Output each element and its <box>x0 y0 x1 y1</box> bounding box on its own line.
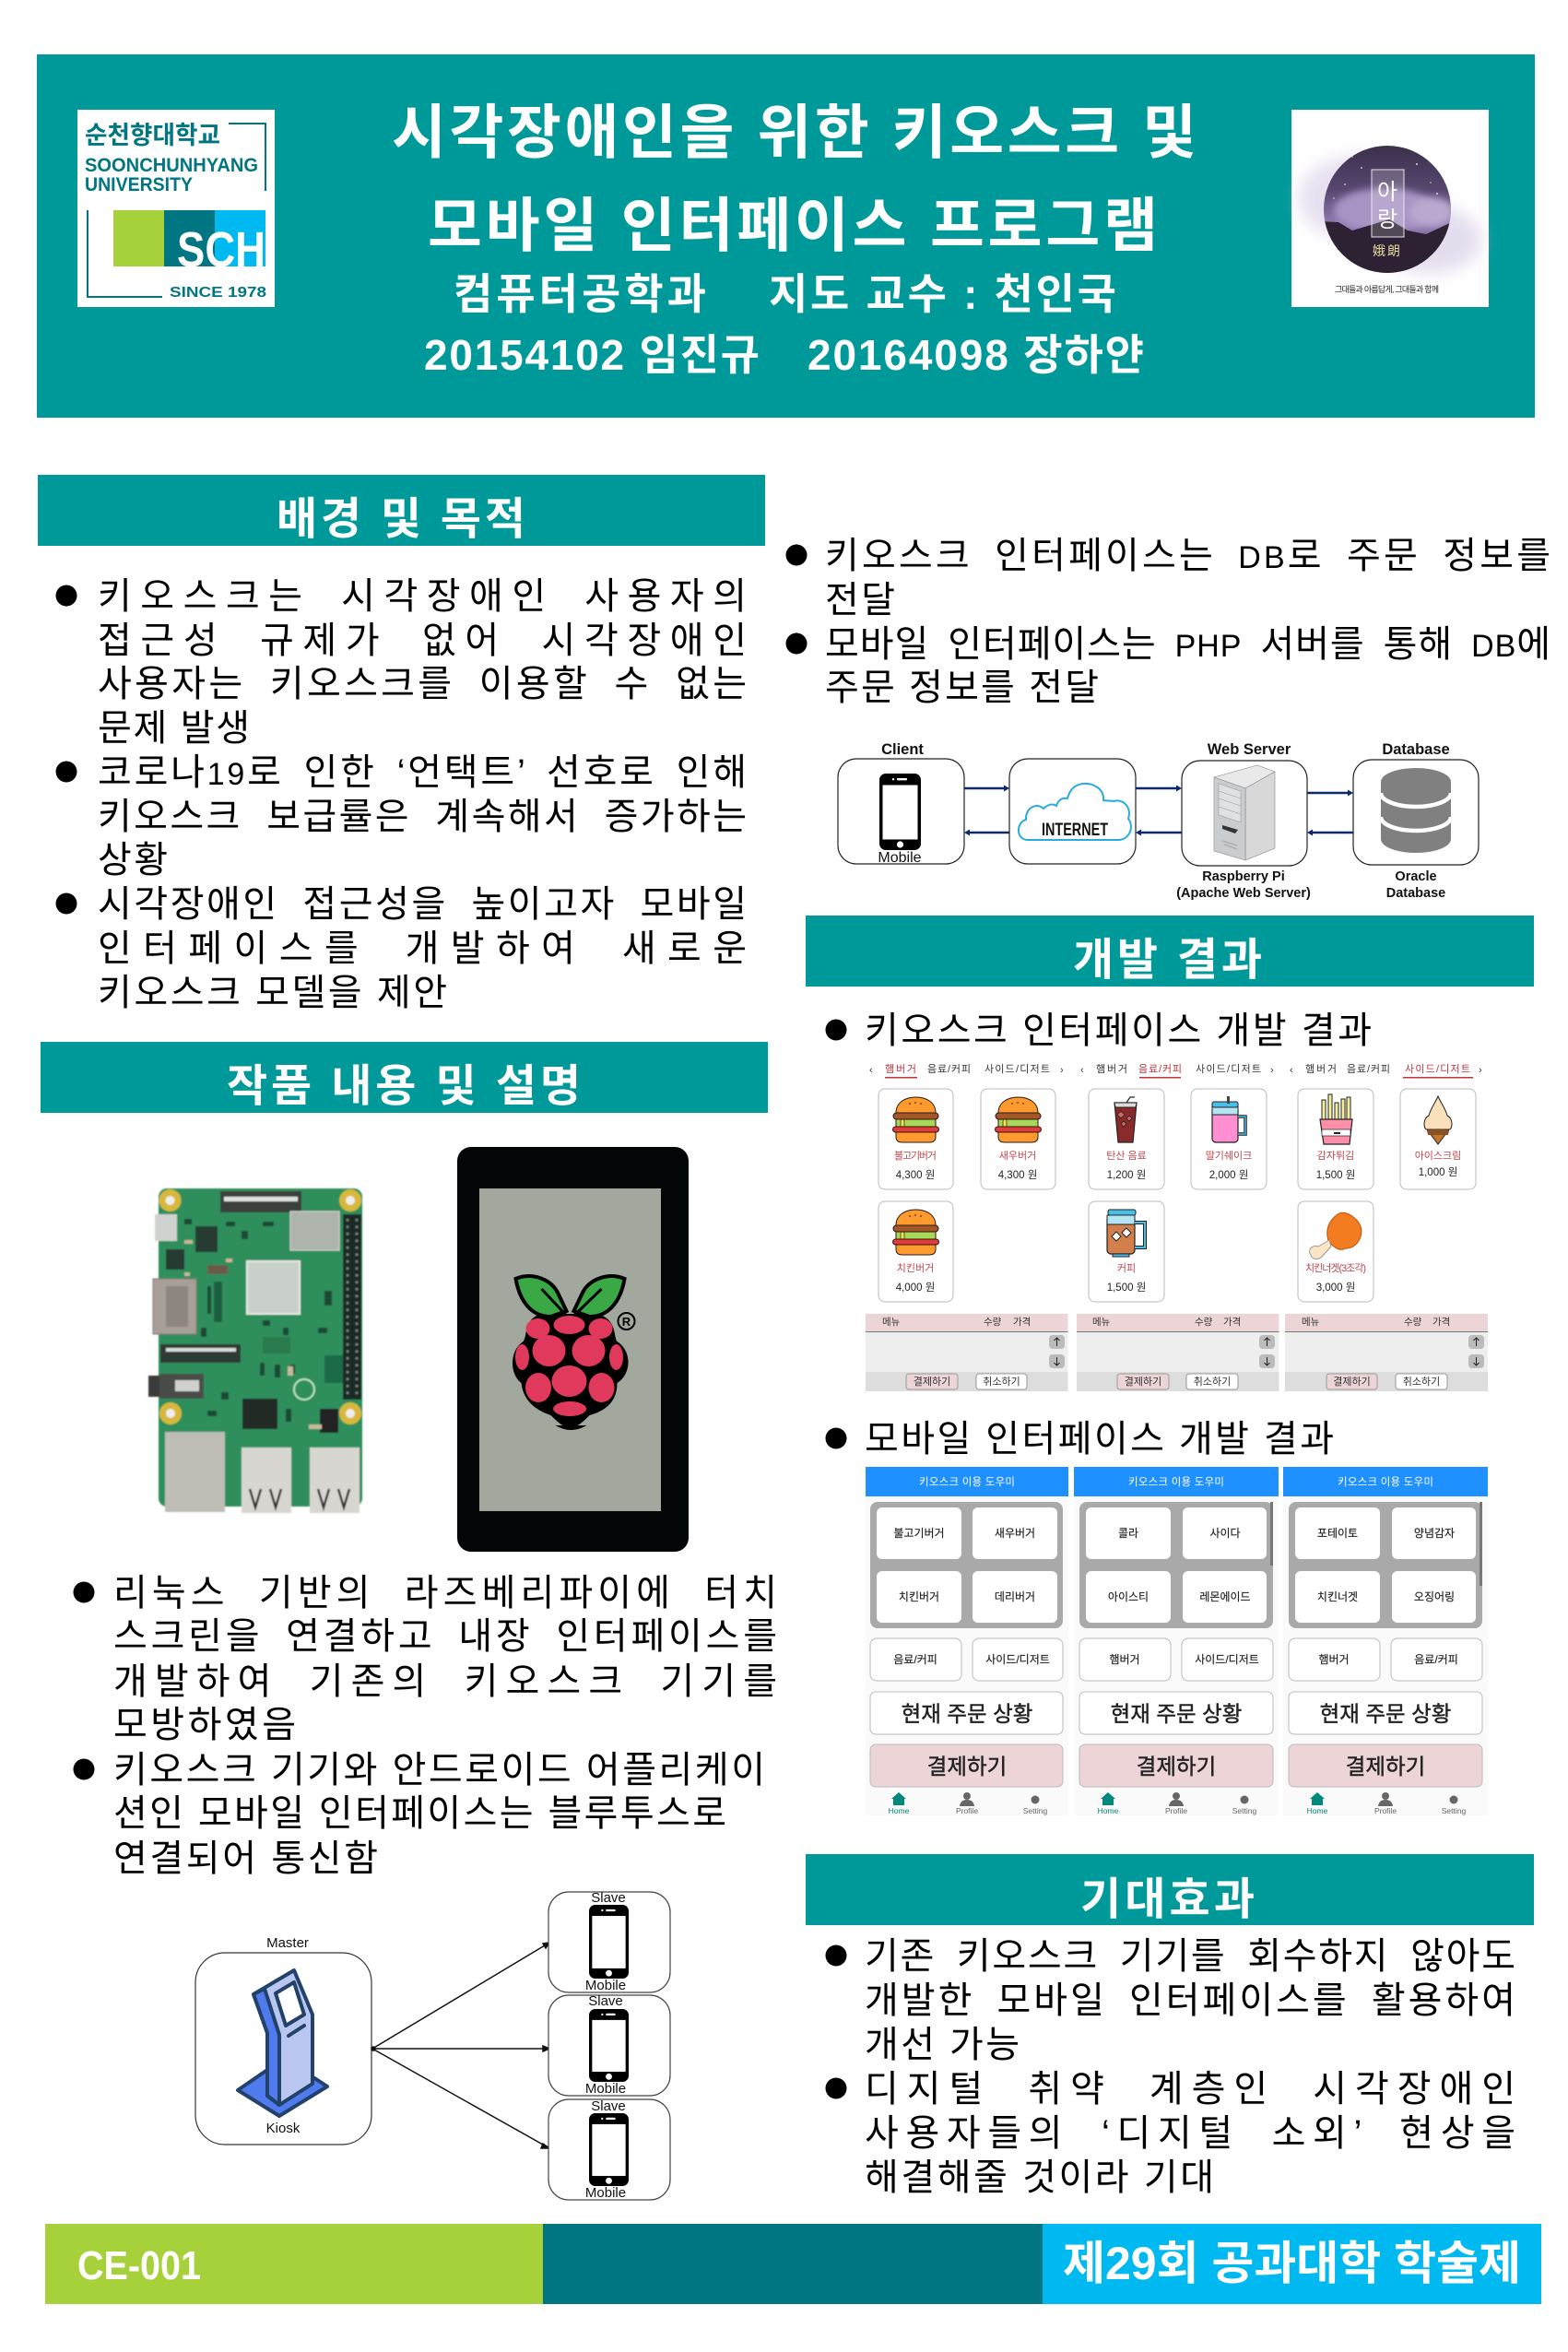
heading: 개발 결과 <box>806 916 1534 987</box>
text block: interface data flow bullets <box>785 536 1550 708</box>
order table: 수량 <box>984 1317 1002 1328</box>
icon: chicken <box>1310 1212 1362 1259</box>
logo: Soonchunhyang University: SCH <box>177 222 265 278</box>
bottom navigation: Profile <box>956 1806 978 1815</box>
logo: Soonchunhyang University <box>77 110 275 307</box>
slave mobile 3: Mobile <box>585 2185 626 2201</box>
order table: 가격 <box>1013 1316 1031 1328</box>
screenshot: kiosk hamburger tab: 4,300 원 <box>896 1168 935 1181</box>
text block: hardware bullets: 션인 모바일 인터페이스는 블루투스로 <box>113 1793 726 1834</box>
screenshot: mobile drink menu: 결제하기 <box>1137 1755 1216 1779</box>
order table: 가격 <box>1223 1316 1241 1328</box>
web server box: Web Server <box>1208 741 1291 758</box>
text block: expected effects: 기존 키오스크 기기를 회수하지 않아도 <box>865 1936 1515 1977</box>
screenshot: kiosk side tab: 사이드/디저트 <box>1405 1063 1470 1075</box>
screenshot: mobile drink menu: 햄버거 <box>1109 1653 1140 1666</box>
department and advisor: 지도 교수 : 천인국 <box>769 270 1116 318</box>
order table: 메뉴 <box>1302 1317 1320 1328</box>
bottom navigation: Profile <box>1165 1806 1187 1815</box>
header banner <box>37 54 1535 418</box>
screenshot: mobile burger menu: 키오스크 이용 도우미 <box>919 1476 1015 1488</box>
database box: Database <box>1382 741 1450 758</box>
screenshot: mobile side menu: 양념감자 <box>1414 1527 1455 1540</box>
screenshot: mobile drink menu: 레몬에이드 <box>1199 1590 1251 1603</box>
bottom navigation: Setting <box>1442 1806 1467 1815</box>
slave mobile 1: Slave <box>591 1890 626 1906</box>
text block: background bullets: 인터페이스를 개발하여 새로운 <box>98 928 747 969</box>
screenshot: mobile burger menu: 불고기버거 <box>893 1527 945 1540</box>
heading: 배경 및 목적 <box>38 475 765 546</box>
screenshot: kiosk side tab: 3,000 원 <box>1316 1281 1355 1294</box>
panel: 개발 결과 <box>806 916 1534 1815</box>
text block: expected effects: 개선 가능 <box>865 2025 1020 2065</box>
text block: background bullets: 코로나19로 인한 ‘언택트’ 선호로 인해 <box>98 752 747 793</box>
screenshot: mobile side menu: 오징어링 <box>1414 1590 1455 1603</box>
text block: hardware bullets: 스크린을 연결하고 내장 인터페이스를 <box>113 1616 777 1657</box>
screenshot: kiosk side tab: 1,000 원 <box>1419 1165 1457 1178</box>
logo: Soonchunhyang University: SINCE 1978 <box>170 285 266 301</box>
panel: 배경 및 목적 <box>38 475 765 1013</box>
logo: 아랑 team: 娥朗 <box>1373 243 1402 258</box>
text block: interface data flow bullets: 키오스크 인터페이스는 DB로 주문 정보를 <box>825 536 1550 576</box>
order table: 결제하기 <box>1125 1375 1161 1388</box>
logo: Soonchunhyang University: UNIVERSITY <box>85 174 193 195</box>
order table: 메뉴 <box>882 1317 901 1328</box>
screenshot: kiosk hamburger tab: 새우버거 <box>999 1150 1036 1162</box>
text block: background bullets: 상황 <box>98 840 168 881</box>
diagram: system architecture <box>838 741 1479 901</box>
order table: 수량 <box>1404 1317 1422 1328</box>
text block: background bullets: 키오스크 모델을 제안 <box>98 973 447 1013</box>
screenshot: kiosk side tab: 감자튀김 <box>1317 1150 1354 1162</box>
bottom navigation: Home <box>1098 1806 1119 1815</box>
screenshot: kiosk side tab: 1,500 원 <box>1316 1168 1355 1181</box>
order table: 취소하기 <box>983 1375 1020 1388</box>
screenshot: kiosk side tab: 아이스크림 <box>1415 1150 1461 1162</box>
text block: hardware bullets: 키오스크 기기와 안드로이드 어플리케이 <box>113 1750 765 1791</box>
bottom navigation <box>1307 1792 1467 1815</box>
screenshot: mobile drink menu: 콜라 <box>1118 1527 1138 1540</box>
bottom navigation: Profile <box>1374 1806 1397 1815</box>
screenshot: kiosk side tab: › <box>1479 1065 1482 1076</box>
screenshot: mobile burger menu: 결제하기 <box>927 1755 1007 1779</box>
screenshot: mobile drink menu: 아이스티 <box>1108 1590 1149 1603</box>
database box: Database <box>1386 886 1445 901</box>
bottom navigation <box>1098 1792 1257 1815</box>
panel: 기대효과 <box>806 1854 1534 2198</box>
screenshot: mobile drink menu: 사이드/디저트 <box>1195 1653 1259 1666</box>
student names: 20154102 임진규 <box>424 331 760 379</box>
text block: background bullets: 키오스크 보급률은 계속해서 증가하는 <box>98 797 747 837</box>
connection arrows <box>371 1943 549 2148</box>
slave mobile 2: Mobile <box>585 2081 626 2097</box>
screenshot: kiosk hamburger tab: 치킨버거 <box>897 1262 934 1274</box>
screenshot: kiosk side tab: 햄버거 <box>1305 1063 1337 1075</box>
database box <box>1353 741 1479 901</box>
text block: hardware bullets: 리눅스 기반의 라즈베리파이에 터치 <box>113 1573 777 1613</box>
icon: coffee <box>1107 1210 1145 1257</box>
title: 모바일 인터페이스 프로그램 <box>428 193 1158 259</box>
text block: expected effects: 사용자들의 ‘디지털 소외’ 현상을 <box>865 2113 1515 2154</box>
bottom navigation <box>889 1792 1048 1815</box>
logo: 아랑 team <box>1291 110 1489 307</box>
screenshot: kiosk drinks tab: 딸기쉐이크 <box>1206 1150 1252 1162</box>
screenshot: mobile drink menu <box>1074 1467 1279 1815</box>
bottom navigation: Setting <box>1232 1806 1257 1815</box>
order table: 취소하기 <box>1194 1375 1231 1388</box>
screenshot: kiosk drinks tab: › <box>1270 1065 1274 1076</box>
screenshot: kiosk hamburger tab: › <box>1060 1065 1064 1076</box>
icon: fries <box>1320 1094 1352 1144</box>
screenshot: kiosk hamburger tab: 햄버거 <box>885 1063 916 1075</box>
logo: 아랑 team: 그대들과 아름답게, 그대들과 함께 <box>1335 284 1439 294</box>
screenshot: kiosk hamburger tab: ‹ <box>869 1065 873 1076</box>
order table: 가격 <box>1432 1316 1450 1328</box>
screenshot: kiosk hamburger tab: 불고기버거 <box>894 1150 937 1162</box>
panel: 작품 내용 및 설명 <box>41 1042 777 2201</box>
heading: 기대효과 <box>806 1854 1534 1925</box>
screenshot: mobile burger menu: 사이드/디저트 <box>985 1653 1050 1666</box>
screenshot: mobile side menu <box>1283 1467 1488 1815</box>
screenshot: kiosk drinks tab: 음료/커피 <box>1138 1063 1182 1075</box>
logo: 아랑 team: 랑 <box>1377 207 1397 232</box>
department and advisor <box>454 270 1116 318</box>
architecture arrows <box>964 786 1353 835</box>
icon: soda <box>1114 1097 1137 1142</box>
diagram: master kiosk to slave mobiles <box>195 1890 670 2201</box>
screenshot: mobile burger menu: 데리버거 <box>995 1590 1035 1603</box>
icon: raspberry logo: R <box>622 1315 631 1329</box>
order table: 결제하기 <box>914 1375 950 1388</box>
screenshot: kiosk drinks tab <box>1077 1063 1279 1391</box>
logo: Soonchunhyang University: 순천향대학교 <box>85 122 220 149</box>
screenshot: mobile burger menu: 치킨버거 <box>899 1590 939 1603</box>
web server box: Raspberry Pi <box>1202 869 1285 884</box>
screenshot: mobile side menu: 키오스크 이용 도우미 <box>1338 1476 1433 1488</box>
screenshot: mobile drink menu: 사이다 <box>1209 1527 1241 1540</box>
screenshot: kiosk drinks tab: 1,200 원 <box>1107 1168 1146 1181</box>
screenshot: mobile side menu: 치킨너겟 <box>1317 1590 1358 1603</box>
text block: expected effects: 개발한 모바일 인터페이스를 활용하여 <box>865 1980 1515 2021</box>
image: touch screen with Raspberry Pi logo <box>457 1147 689 1552</box>
order table: 메뉴 <box>1092 1317 1111 1328</box>
text block: expected effects: 해결해줄 것이라 기대 <box>865 2157 1214 2198</box>
text block: interface data flow bullets: 전달 <box>825 580 895 621</box>
screenshot: kiosk drinks tab: 탄산 음료 <box>1106 1150 1147 1162</box>
database box: Oracle <box>1395 869 1437 884</box>
text block: hardware bullets: 연결되어 통신함 <box>113 1838 378 1879</box>
kiosk box <box>195 1935 371 2145</box>
icon: strawberry shake <box>1212 1096 1245 1142</box>
heading: 기대효과: 기대효과 <box>1080 1875 1255 1924</box>
department and advisor: 컴퓨터공학과 <box>454 270 706 318</box>
client box: Mobile <box>878 850 922 866</box>
heading: 배경 및 목적: 배경 및 목적 <box>277 495 525 544</box>
order table: 결제하기 <box>1333 1375 1371 1388</box>
text block: interface data flow bullets: 모바일 인터페이스는 PHP 서버를 통해 DB에 <box>825 624 1550 665</box>
web server box: (Apache Web Server) <box>1176 886 1311 901</box>
slave mobile 3 <box>548 2098 670 2201</box>
text block: background bullets: 접근성 규제가 없어 시각장애인 <box>98 621 747 661</box>
footer code: CE-001 <box>77 2243 201 2288</box>
screenshot: kiosk hamburger tab: 사이드/디저트 <box>984 1063 1050 1075</box>
text block: expected effects <box>826 1936 1515 2198</box>
internet cloud: INTERNET <box>1042 821 1108 840</box>
screenshot: mobile drink menu: 키오스크 이용 도우미 <box>1128 1476 1224 1488</box>
slave mobile 2 <box>548 1993 670 2097</box>
order table: 수량 <box>1195 1317 1213 1328</box>
screenshot: kiosk drinks tab: 커피 <box>1117 1262 1136 1274</box>
text block: hardware bullets: 모방하였음 <box>113 1705 296 1745</box>
screenshot: mobile burger menu: 음료/커피 <box>893 1653 937 1666</box>
bottom navigation: Home <box>889 1806 910 1815</box>
text block: expected effects: 디지털 취약 계층인 시각장애인 <box>865 2069 1515 2110</box>
slave mobile 1: Mobile <box>585 1978 626 1993</box>
student names <box>424 331 1144 379</box>
screenshot: kiosk hamburger tab: 4,300 원 <box>998 1168 1037 1181</box>
screenshot: mobile burger menu <box>866 1467 1068 1815</box>
order table <box>866 1314 1067 1391</box>
bottom navigation: Home <box>1307 1806 1328 1815</box>
order table: 취소하기 <box>1403 1375 1440 1388</box>
client box: Client <box>881 741 924 758</box>
heading: 작품 내용 및 설명: 작품 내용 및 설명 <box>227 1062 581 1111</box>
screenshot: kiosk drinks tab: ‹ <box>1080 1065 1084 1076</box>
order table <box>1077 1314 1279 1391</box>
text block: background bullets: 사용자는 키오스크를 이용할 수 없는 <box>98 664 747 704</box>
web server box <box>1176 741 1311 901</box>
footer event name: 제29회 공과대학 학술제 <box>1063 2238 1521 2289</box>
student names: 20164098 장하얀 <box>808 331 1144 379</box>
screenshot: mobile side menu: 햄버거 <box>1318 1653 1350 1666</box>
icon: raspberry logo <box>513 1276 634 1430</box>
screenshot: kiosk side tab: 음료/커피 <box>1347 1063 1390 1075</box>
footer bar <box>45 2224 1541 2304</box>
screenshot: kiosk drinks tab: 햄버거 <box>1096 1063 1127 1075</box>
logo: 아랑 team: 아 <box>1377 180 1397 205</box>
text block: background bullets: 시각장애인 접근성을 높이고자 모바일 <box>98 884 747 925</box>
screenshot: kiosk hamburger tab <box>866 1063 1067 1391</box>
title <box>392 100 1197 259</box>
screenshot: kiosk hamburger tab: 음료/커피 <box>927 1063 971 1075</box>
text block: hardware bullets <box>74 1573 777 1879</box>
subheading: mobile result: 모바일 인터페이스 개발 결과 <box>865 1419 1334 1460</box>
logo: Soonchunhyang University: SOONCHUNHYANG <box>85 155 258 176</box>
slave mobile 3: Slave <box>591 2098 626 2114</box>
screenshot: kiosk drinks tab: 사이드/디저트 <box>1196 1063 1261 1075</box>
text block: background bullets: 문제 발생 <box>98 708 250 749</box>
bottom navigation: Setting <box>1023 1806 1048 1815</box>
kiosk box: Master <box>266 1935 309 1951</box>
screenshot: mobile side menu: 결제하기 <box>1346 1755 1425 1779</box>
subheading: kiosk result: 키오스크 인터페이스 개발 결과 <box>865 1011 1372 1051</box>
kiosk box: Kiosk <box>266 2121 301 2136</box>
screenshot: kiosk side tab: 치킨너겟(3조각) <box>1305 1262 1366 1274</box>
screenshot: kiosk side tab <box>1285 1063 1488 1391</box>
text block: hardware bullets: 개발하여 기존의 키오스크 기기를 <box>113 1661 777 1702</box>
heading: 작품 내용 및 설명 <box>41 1042 768 1113</box>
title: 시각장애인을 위한 키오스크 및 <box>392 100 1197 166</box>
icon: ice cream <box>1424 1096 1452 1144</box>
text block: background bullets <box>55 576 747 1013</box>
screenshot: mobile side menu: 음료/커피 <box>1414 1653 1458 1666</box>
screenshot: mobile side menu: 포테이토 <box>1317 1527 1358 1540</box>
client box <box>838 741 964 866</box>
slave mobile 1 <box>548 1890 670 1993</box>
screenshot: kiosk drinks tab: 1,500 원 <box>1107 1281 1146 1294</box>
screenshot: mobile drink menu: 현재 주문 상황 <box>1111 1702 1242 1726</box>
screenshot: kiosk side tab: ‹ <box>1290 1065 1293 1076</box>
order table <box>1285 1314 1488 1391</box>
internet cloud <box>1009 759 1136 864</box>
heading: 개발 결과: 개발 결과 <box>1073 936 1262 985</box>
image: Raspberry Pi board <box>148 1188 362 1513</box>
text block: interface data flow bullets: 주문 정보를 전달 <box>825 668 1099 708</box>
slave mobile 2: Slave <box>588 1993 623 2009</box>
text block: background bullets: 키오스크는 시각장애인 사용자의 <box>98 576 747 617</box>
screenshot: kiosk drinks tab: 2,000 원 <box>1209 1168 1248 1181</box>
screenshot: mobile burger menu: 새우버거 <box>995 1527 1035 1540</box>
screenshot: mobile side menu: 현재 주문 상황 <box>1320 1702 1451 1726</box>
screenshot: kiosk hamburger tab: 4,000 원 <box>896 1281 935 1294</box>
screenshot: mobile burger menu: 현재 주문 상황 <box>902 1702 1032 1726</box>
